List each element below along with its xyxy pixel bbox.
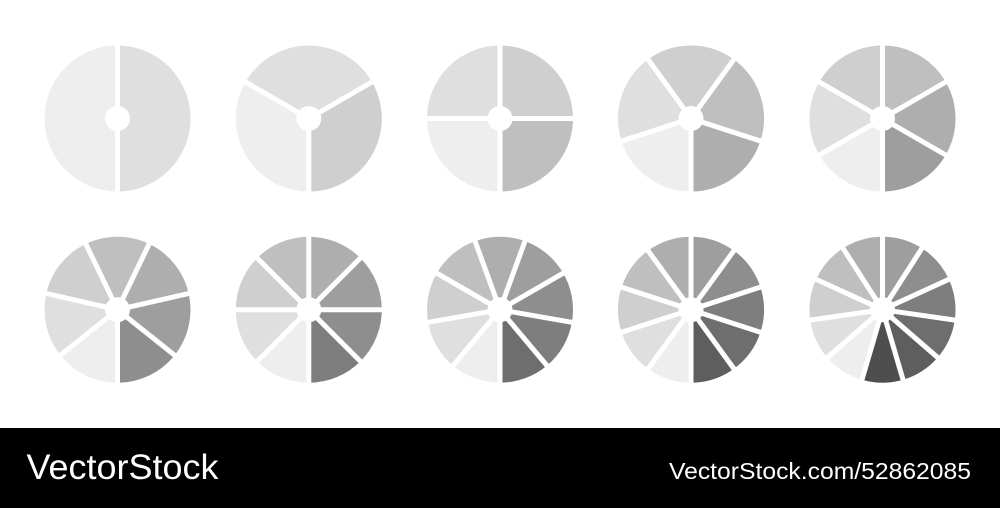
pie chart: 9 segments — [426, 239, 574, 385]
footer logo text: VectorStock — [26, 448, 219, 487]
pie chart: 7 segments — [44, 242, 191, 385]
pie chart: 3 segments — [244, 69, 374, 194]
footer band — [0, 428, 1000, 508]
pie chart: 5 segments — [620, 58, 762, 193]
pie chart: 8 segments — [234, 235, 384, 385]
pie chart: 6 segments — [818, 44, 947, 194]
pie chart: 4 segments — [425, 44, 575, 194]
pie chart: 11 segments — [808, 235, 957, 382]
pie chart: 2 segments — [81, 44, 154, 194]
footer image id text: VectorStock.com/52862085 — [669, 458, 971, 484]
pie chart: 10 segments — [620, 235, 762, 385]
